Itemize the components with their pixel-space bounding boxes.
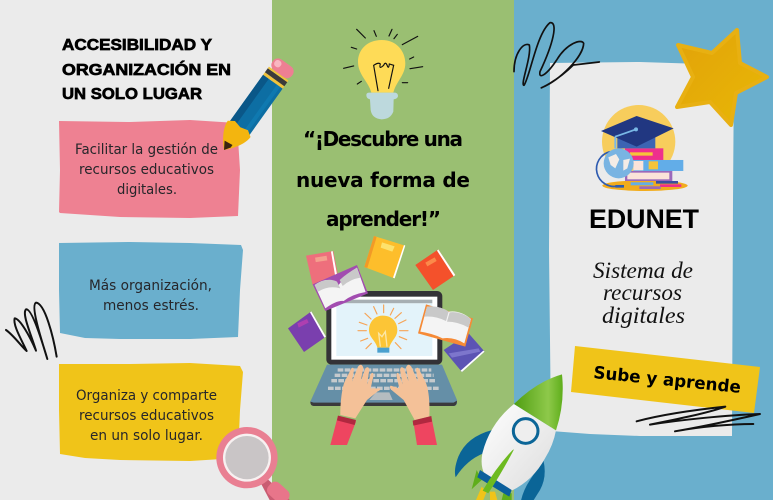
book: pink: [306, 251, 338, 285]
right hand and sleeve: [390, 365, 437, 445]
card: más organización: Más organización,: [89, 278, 212, 294]
icon: pencil: [213, 55, 298, 158]
book: purple: [288, 311, 326, 352]
text: sistema de recursos digitales: recursos: [603, 280, 682, 305]
card: facilitar: digitales.: [117, 182, 177, 198]
flames: [476, 487, 497, 500]
card: organiza y comparte: Organiza y comparte: [76, 388, 217, 404]
open book: orange: [418, 304, 473, 347]
screen bulb: [358, 305, 408, 353]
heading: descubre: “¡Descubre una: [303, 127, 463, 151]
open book: purple: [313, 265, 368, 311]
book: yellow: [364, 236, 405, 278]
panel: center background: [272, 0, 514, 500]
left fin: [455, 430, 492, 477]
heading: descubre: aprender!”: [326, 207, 441, 231]
collar: [477, 470, 512, 497]
card: más organización: menos estrés.: [103, 298, 199, 314]
book: red: [415, 249, 455, 290]
logo: graduation cap, books and globe: [596, 105, 688, 191]
banner: sube y aprende: [571, 346, 760, 413]
card: facilitar: Facilitar la gestión de: [75, 142, 218, 158]
icon: magnifying glass: [216, 427, 293, 500]
card: organiza y comparte: recursos educativos: [79, 408, 214, 424]
icon: signature scribble: [514, 23, 599, 88]
icon: light bulb: [344, 29, 423, 119]
title: edunet: EDUNET: [589, 204, 699, 234]
heading: descubre: [296, 127, 470, 231]
window: [513, 419, 538, 443]
panel: right background: [514, 0, 773, 500]
right fin: [521, 460, 545, 500]
icon: bottom scribble: [637, 407, 760, 431]
card: más organización: [59, 242, 243, 339]
body: [482, 404, 556, 491]
icon: star: [677, 30, 767, 125]
keyboard base: [310, 365, 457, 406]
card: edunet white sheet: [549, 62, 734, 436]
left hand and sleeve: [330, 365, 380, 445]
card: organiza y comparte: en un solo lugar.: [90, 428, 203, 444]
text: sistema de recursos digitales: digitales: [602, 303, 685, 328]
book: indigo: [444, 333, 485, 372]
banner: sube y aprende: Sube y aprende: [592, 363, 742, 398]
heading: accesibilidad: [62, 37, 231, 103]
card: organiza y comparte: [59, 363, 243, 461]
panel: left background: [0, 0, 272, 500]
icon: left scribble: [6, 303, 57, 359]
card: facilitar: recursos educativos: [79, 162, 214, 178]
card: facilitar: [59, 120, 240, 218]
heading: descubre: nueva forma de: [296, 168, 470, 192]
heading: accesibilidad: ACCESIBILIDAD Y: [62, 37, 212, 54]
text: sistema de recursos digitales: Sistema de: [593, 258, 693, 283]
heading: accesibilidad: UN SOLO LUGAR: [62, 86, 202, 103]
green stripe: [483, 449, 514, 493]
illustration: laptop with books and hands: [288, 236, 485, 445]
laptop screen: [326, 291, 442, 365]
nose: [514, 374, 563, 430]
text: sistema de recursos digitales: [593, 258, 693, 328]
icon: rocket: [455, 374, 563, 500]
heading: accesibilidad: ORGANIZACIÓN EN: [62, 60, 231, 79]
